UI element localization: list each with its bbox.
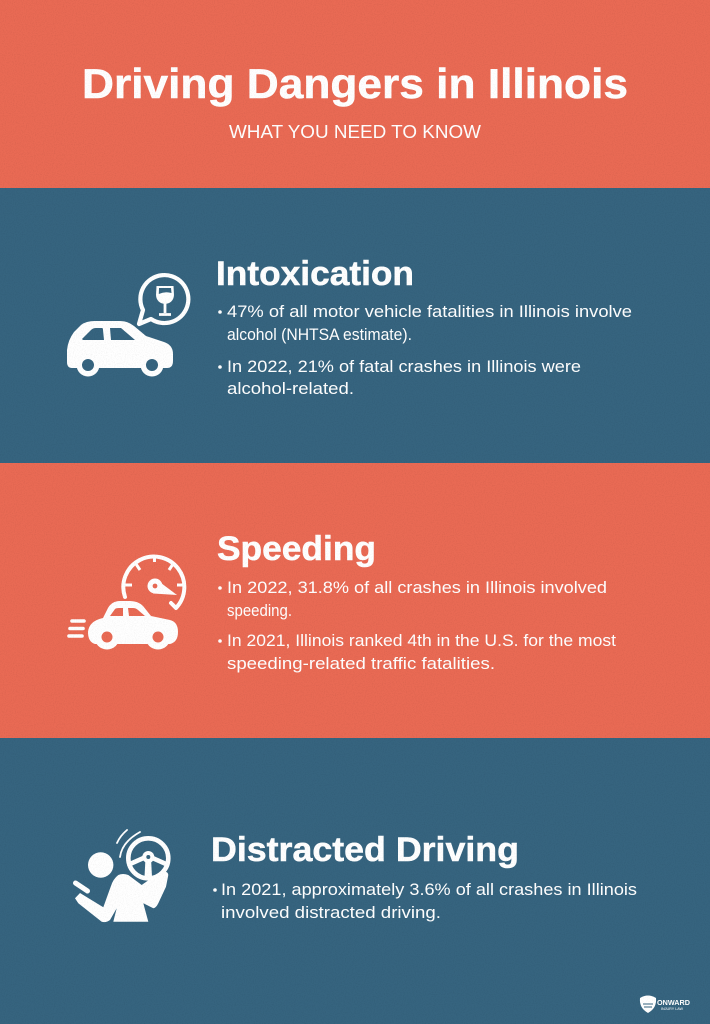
heading: intoxication: Intoxication bbox=[216, 255, 414, 293]
bullet list: intoxication: alcohol-related. bbox=[227, 380, 354, 398]
logo: Onward Injury Law: ONWARD bbox=[657, 998, 691, 1007]
bullet list: speeding: speeding-related traffic fatalities. bbox=[227, 655, 495, 673]
bullet list: distracted driving: involved distracted driving. bbox=[221, 904, 441, 922]
heading: distracted driving: Distracted Driving bbox=[211, 831, 519, 869]
bullet list: speeding: In 2022, 31.8% of all crashes in Illinois involved bbox=[227, 579, 607, 597]
bullet list: speeding: In 2021, Illinois ranked 4th in the U.S. for the most bbox=[227, 632, 616, 650]
panel: speeding bbox=[0, 463, 710, 738]
icon: car with wine glass bubble bbox=[67, 275, 188, 376]
icon: distracted driver bbox=[75, 830, 168, 922]
subtitle: WHAT YOU NEED TO KNOW bbox=[229, 122, 481, 142]
bullet list: speeding: speeding. bbox=[227, 602, 292, 620]
panel: header bbox=[0, 0, 710, 188]
logo: Onward Injury Law: INJURY LAW bbox=[661, 1007, 684, 1011]
bullet list: distracted driving bbox=[213, 881, 637, 922]
bullet list: intoxication: 47% of all motor vehicle fatalities in Illinois involve bbox=[227, 303, 632, 321]
bullet list: distracted driving: In 2021, approximately 3.6% of all crashes in Illinois bbox=[221, 881, 637, 899]
title: Driving Dangers in Illinois bbox=[82, 60, 628, 107]
bullet list: speeding bbox=[218, 579, 616, 673]
bullet list: intoxication bbox=[218, 303, 632, 398]
logo: Onward Injury Law bbox=[640, 996, 691, 1013]
panel: intoxication bbox=[0, 188, 710, 463]
heading: speeding: Speeding bbox=[217, 530, 376, 568]
panel: distracted driving bbox=[0, 738, 710, 1024]
bullet list: intoxication: In 2022, 21% of fatal crashes in Illinois were bbox=[227, 358, 581, 376]
icon: speeding car with gauge bbox=[69, 555, 184, 650]
bullet list: intoxication: alcohol (NHTSA estimate). bbox=[227, 326, 412, 344]
